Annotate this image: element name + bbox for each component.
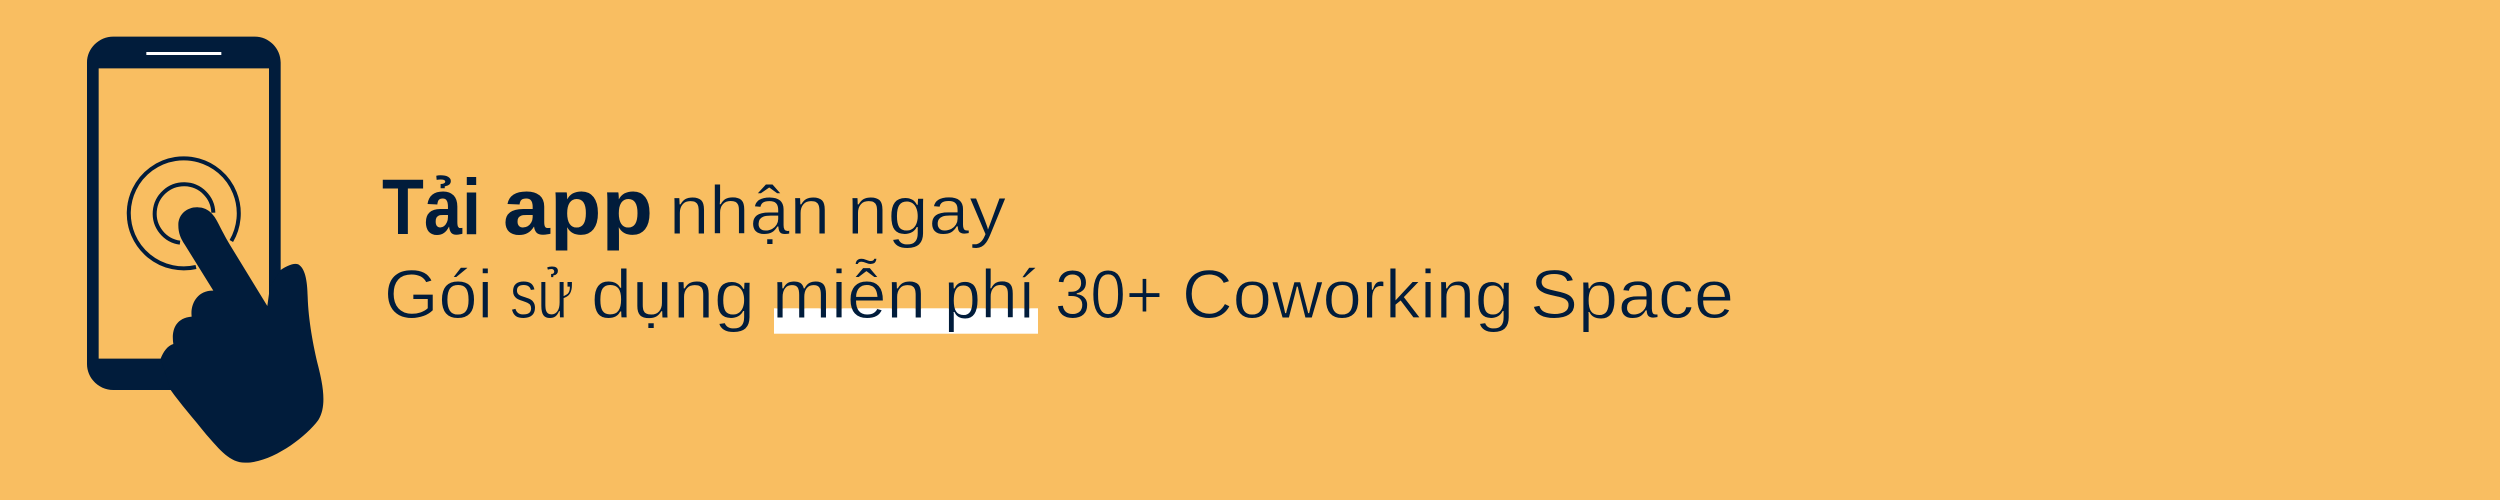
highlight bar behind "miễn phí" [774, 308, 1038, 334]
icon: phone with tapping hand [87, 37, 323, 463]
heading line 2: Gói [384, 256, 493, 333]
heading line 2: Coworking [1182, 256, 1514, 333]
heading line 1: Tải [382, 162, 481, 251]
phone body [87, 37, 281, 390]
heading line 1: app [503, 162, 653, 251]
heading line 2: 30+ [1055, 256, 1163, 333]
heading line 2: phí [944, 256, 1036, 333]
heading line 1 [382, 162, 1007, 251]
tap ripple rings [129, 158, 239, 268]
heading line 2: dụng [591, 256, 755, 333]
heading line 1: ngay [847, 172, 1007, 249]
heading line 2: sử [510, 256, 574, 333]
phone speaker [146, 52, 221, 55]
heading line 2 [384, 256, 1734, 333]
heading line 1: nhận [669, 172, 830, 249]
hand [161, 207, 323, 463]
heading line 2: miễn [772, 256, 926, 333]
heading line 2: Space [1530, 256, 1734, 333]
